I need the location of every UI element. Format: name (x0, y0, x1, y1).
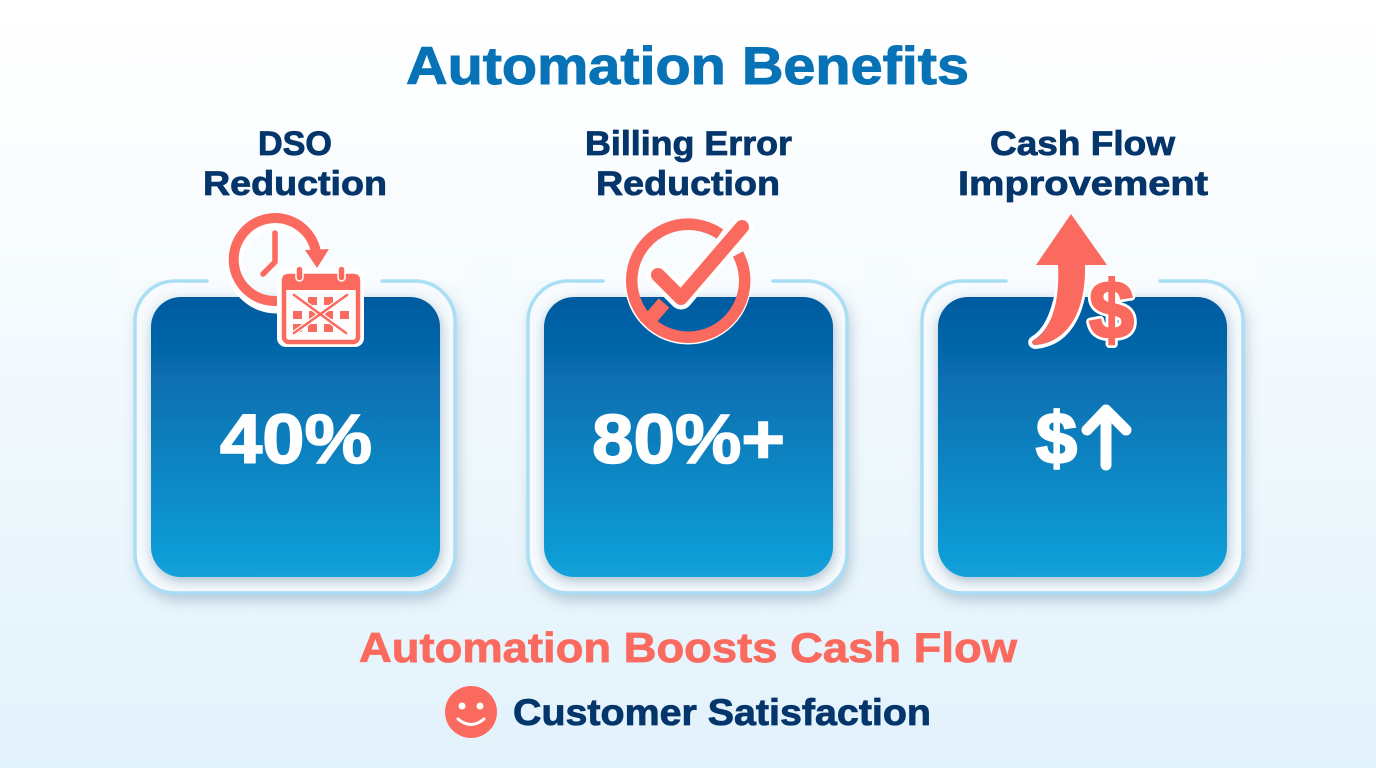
heading: Billing Error Reduction: Reduction (596, 165, 780, 203)
icon: rising arrow with dollar (1030, 214, 1134, 356)
icon: clock to calendar (234, 218, 364, 347)
card: blue tile (151, 297, 440, 577)
panel: DSO reduction (120, 125, 470, 593)
heading: Cash Flow Improvement (958, 125, 1208, 203)
card: blue tile (938, 297, 1227, 577)
value: dollar up (1036, 399, 1126, 479)
value: 80%+: 80%+ (592, 400, 785, 478)
value: 40%: 40% (220, 400, 372, 478)
icon: rising arrow with dollar: $ (1089, 265, 1134, 356)
title: Automation Benefits (406, 37, 969, 96)
heading: Cash Flow Improvement: Improvement (958, 165, 1208, 203)
value: dollar up: $ (1036, 399, 1077, 479)
icon: check in circle (628, 221, 748, 341)
heading: DSO Reduction (203, 125, 387, 203)
heading: Billing Error Reduction: Billing Error (585, 125, 792, 163)
icon: rising arrow with dollar: $ (1089, 265, 1134, 356)
panel: cash flow improvement (907, 125, 1257, 593)
card frame (120, 262, 470, 593)
icon: smiley (445, 686, 497, 738)
heading: Cash Flow Improvement: Cash Flow (990, 125, 1176, 163)
card frame (907, 262, 1257, 593)
heading: DSO Reduction: DSO (258, 125, 332, 163)
card: blue tile (544, 297, 833, 577)
heading: Billing Error Reduction (585, 125, 792, 203)
tagline: Automation Boosts Cash Flow (359, 624, 1017, 671)
heading: DSO Reduction: Reduction (203, 165, 387, 203)
panel: billing error reduction (513, 125, 863, 593)
label: customer satisfaction: Customer Satisfaction (513, 692, 931, 733)
card frame (513, 262, 863, 593)
